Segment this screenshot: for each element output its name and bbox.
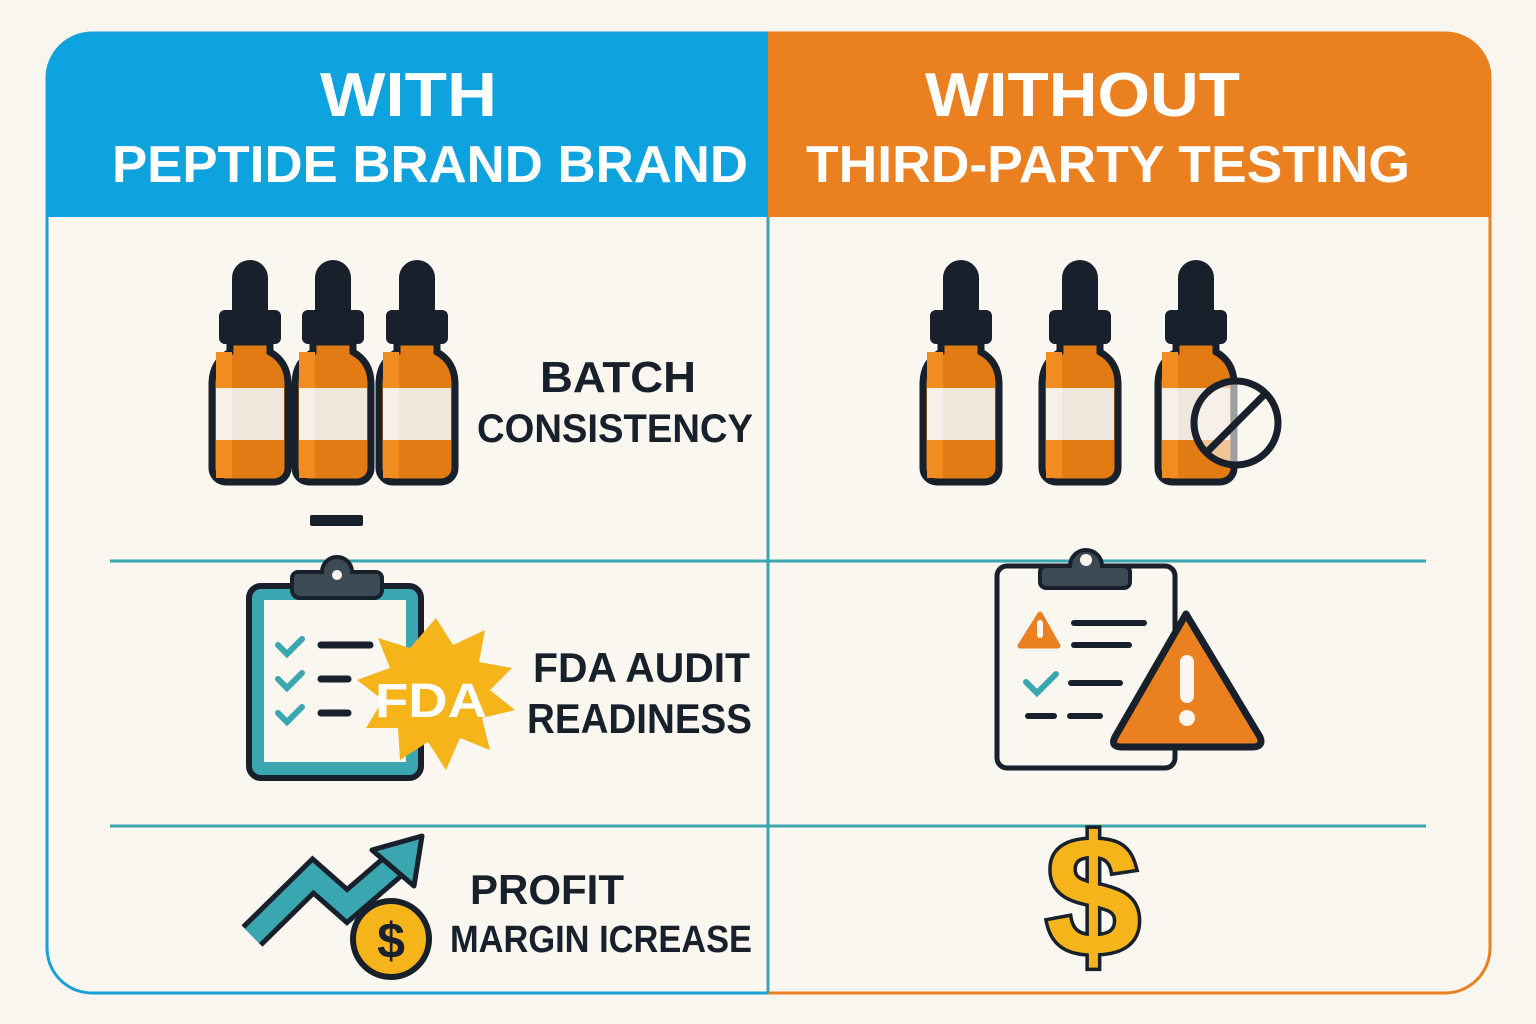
text: profit margin increase (450, 866, 752, 961)
icon: prohibited sign (1194, 381, 1278, 465)
header: with (47, 33, 768, 217)
header: without: THIRD-PARTY TESTING (806, 136, 1410, 194)
icon: clipboard with FDA seal (249, 557, 515, 778)
text: FDA audit readiness (527, 644, 752, 742)
panel: with (left) (47, 33, 768, 993)
text: batch consistency: CONSISTENCY (477, 407, 753, 451)
icon: warning triangle (1114, 614, 1261, 747)
icon: FDA seal: FDA (375, 675, 487, 728)
icon: coin (353, 901, 429, 977)
panel: without (right) (768, 33, 1490, 993)
icon: inconsistent bottles (923, 262, 1278, 482)
icon: FDA seal (357, 618, 515, 770)
header: without: WITHOUT (925, 61, 1240, 130)
header: with: PEPTIDE BRAND BRAND (112, 136, 748, 194)
icon: growth arrow with coin (252, 836, 429, 977)
header: without (768, 33, 1490, 217)
text: batch consistency (477, 353, 753, 451)
header: with: WITH (320, 61, 497, 130)
text: profit margin increase: PROFIT (470, 866, 624, 913)
icon: clipboard with warning (997, 550, 1261, 768)
text: profit margin increase: MARGIN ICREASE (450, 919, 752, 961)
text: FDA audit readiness: FDA AUDIT (533, 644, 750, 691)
text: FDA audit readiness: READINESS (527, 695, 752, 742)
icon: dollar sign: $ (1046, 802, 1140, 992)
text: batch consistency: BATCH (540, 353, 696, 402)
icon: three consistent bottles (212, 262, 455, 526)
icon: coin: $ (377, 913, 405, 969)
